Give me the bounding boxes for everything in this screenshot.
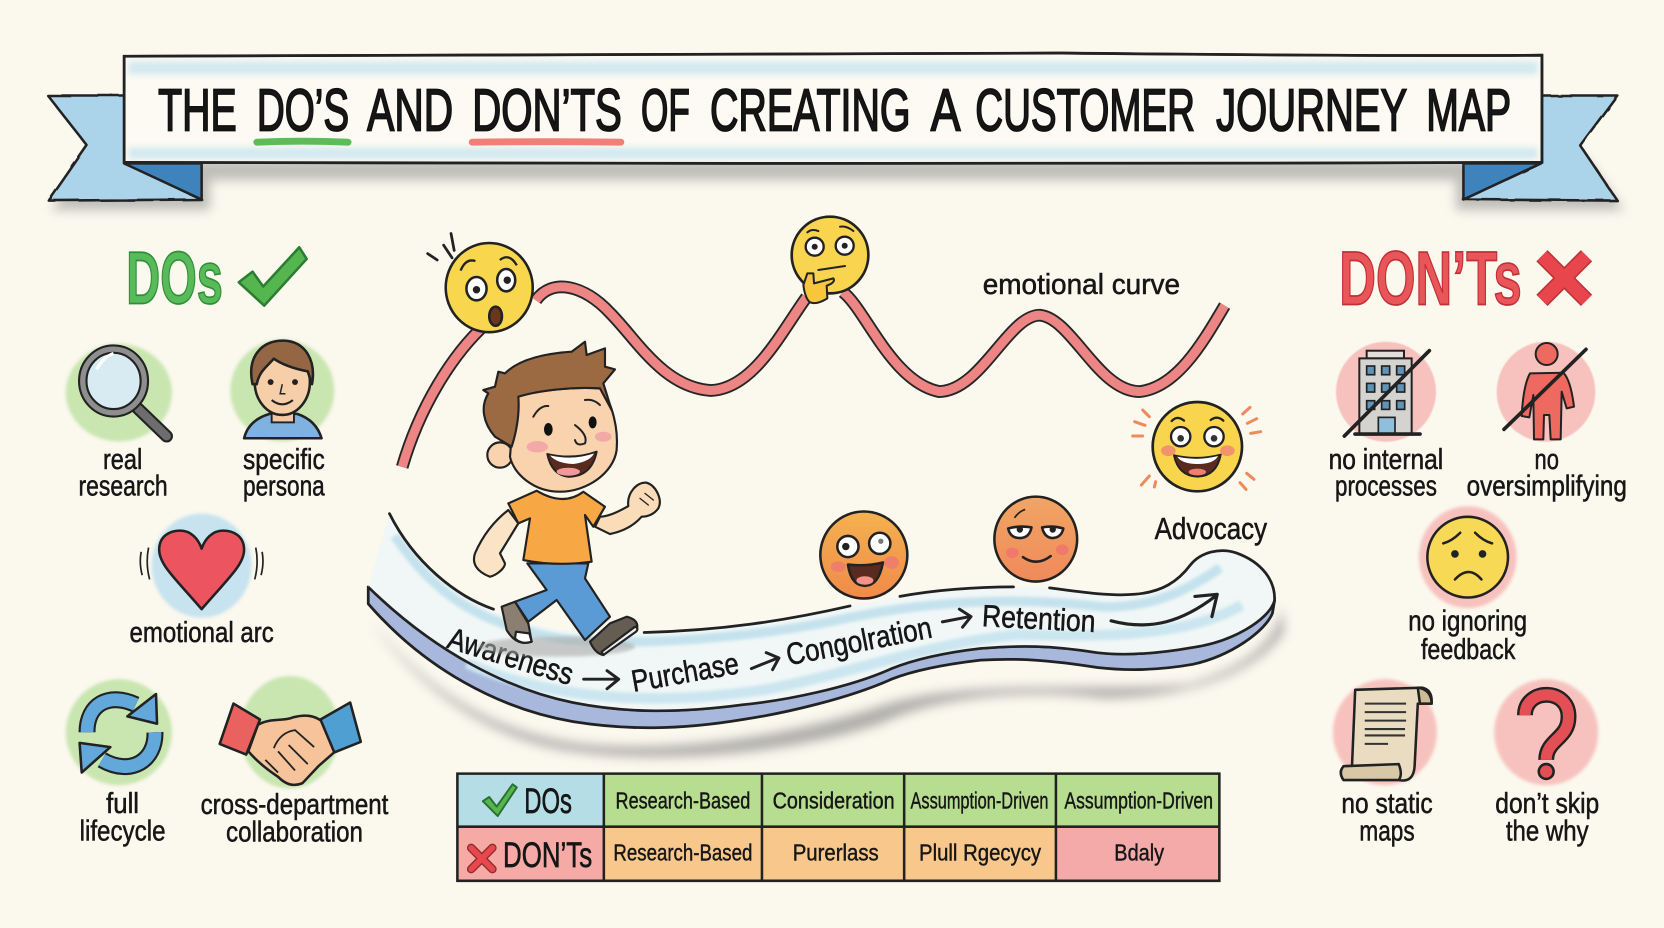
- label: cross-department collaboration: [201, 789, 388, 849]
- label: no ignoring feedback: feedback: [1421, 634, 1516, 666]
- label: no internal processes: no internal: [1329, 444, 1443, 476]
- label: real research: [79, 444, 168, 503]
- title banner: [48, 53, 1624, 210]
- cell text row 2: Purerlass: [793, 840, 879, 866]
- emoji: delighted with rays: [1133, 402, 1261, 491]
- title text: CUSTOMER: [975, 77, 1195, 144]
- icon: crossed-out person: [1497, 342, 1595, 442]
- icon: heart: [140, 514, 263, 618]
- stage label: Advocacy: Advocacy: [1155, 511, 1268, 546]
- emoji: excited: [820, 512, 907, 599]
- label: no static maps: maps: [1359, 815, 1415, 847]
- title text: JOURNEY: [1216, 77, 1407, 144]
- label: specific persona: [243, 444, 325, 503]
- cell text row 2: Plull Rgecycy: [919, 840, 1041, 866]
- icon: green check mark: [239, 247, 307, 306]
- stage label: Retention: Retention: [981, 598, 1096, 639]
- icon: red cross: [1542, 256, 1587, 300]
- banner main strip: [124, 53, 1542, 164]
- icon: persona portrait: [230, 340, 334, 441]
- icon: magnifying glass: [66, 344, 172, 441]
- label: no internal processes: [1329, 444, 1443, 503]
- label: no oversimplifying: no: [1535, 444, 1559, 476]
- comparison table: [457, 774, 1219, 881]
- character: walking boy: [474, 342, 660, 657]
- road side band: [368, 587, 1275, 728]
- cell text row 2: Bdaly: [1114, 840, 1164, 866]
- red underline: [472, 138, 621, 145]
- cell text row 1: [616, 788, 1213, 814]
- cell text row 1: Consideration: [773, 788, 895, 814]
- label: don't skip the why: don’t skip: [1495, 788, 1599, 820]
- label: full lifecycle: [80, 788, 166, 847]
- cell text row 2: [613, 840, 1164, 866]
- icon: sad face: [1419, 506, 1516, 608]
- DON'Ts heading: DON’Ts: [1339, 237, 1522, 322]
- icon: crossed-out building: [1336, 342, 1436, 442]
- chart: emotional curve: [402, 217, 1261, 599]
- stage label: Purchase: Purchase: [629, 646, 741, 699]
- green underline: [257, 141, 348, 142]
- icon: question mark: [1494, 679, 1598, 785]
- label: no static maps: no static: [1341, 788, 1433, 820]
- label: full lifecycle: lifecycle: [80, 815, 166, 847]
- cell text row 1: Assumption-Driven: [1064, 788, 1213, 814]
- arrow: purchase to consideration: [751, 653, 779, 670]
- emoji: surprised: [428, 233, 533, 332]
- title text: DO’S: [257, 77, 349, 144]
- cell text row 2: Research-Based: [613, 840, 752, 866]
- label: no ignoring feedback: [1408, 605, 1527, 666]
- stage label: Awareness: Awareness: [444, 621, 578, 692]
- label: no oversimplifying: [1467, 444, 1627, 503]
- arrow: awareness to purchase: [584, 671, 619, 689]
- stage label: Consideration: Congolration: [783, 610, 935, 672]
- title text: DON’TS: [472, 77, 622, 144]
- label: don't skip the why: [1495, 788, 1599, 847]
- road surface: [368, 514, 1275, 711]
- curve line: [402, 287, 1225, 467]
- table row header: DON'Ts: DON’Ts: [503, 836, 592, 875]
- label: don't skip the why: the why: [1506, 815, 1589, 847]
- label: no static maps: [1341, 788, 1433, 847]
- table cells: [457, 774, 1219, 881]
- label: no ignoring feedback: no ignoring: [1408, 605, 1527, 637]
- label: real research: real: [103, 444, 142, 476]
- label: cross-department collaboration: cross-department: [201, 789, 388, 821]
- title text: AND: [367, 77, 453, 144]
- label: cross-department collaboration: collaboration: [226, 817, 363, 849]
- label: emotional curve: emotional curve: [983, 269, 1180, 301]
- icon: lifecycle arrows: [66, 679, 172, 785]
- icon: table check: [483, 784, 517, 816]
- cell text row 1: Assumption-Driven: [911, 788, 1048, 814]
- banner right ribbon tail: [1463, 96, 1617, 201]
- title text: A: [931, 77, 961, 144]
- icon: handshake: [220, 676, 361, 788]
- label: no internal processes: processes: [1335, 471, 1437, 503]
- banner left ribbon tail: [48, 96, 202, 201]
- curved arrow to advocacy: [1111, 594, 1217, 625]
- title text: OF: [641, 77, 690, 144]
- icon: table cross: [471, 848, 492, 869]
- label: real research: research: [79, 471, 168, 503]
- title text: THE: [158, 77, 237, 144]
- table row header: DOs: DOs: [524, 782, 572, 821]
- title text: MAP: [1426, 77, 1511, 144]
- arrow: consideration to retention: [942, 609, 971, 627]
- label: no oversimplifying: oversimplifying: [1467, 471, 1627, 503]
- label: full lifecycle: full: [106, 788, 139, 820]
- label: emotional arc: emotional arc: [129, 617, 274, 649]
- label: specific persona: specific: [243, 444, 325, 476]
- panel: DON'Ts column: [1329, 237, 1627, 847]
- label: specific persona: persona: [243, 471, 325, 503]
- journey road: [368, 511, 1284, 757]
- icon: static scroll: [1333, 679, 1437, 785]
- DOs heading: DOs: [126, 237, 223, 320]
- road shadow: [371, 605, 1284, 757]
- emoji: thinking: [792, 217, 868, 303]
- title text: [158, 77, 1511, 144]
- emoji: unimpressed: [994, 497, 1077, 582]
- cell text row 1: Research-Based: [616, 788, 750, 814]
- title text: CREATING: [710, 77, 911, 144]
- panel: DOs column: [66, 237, 388, 849]
